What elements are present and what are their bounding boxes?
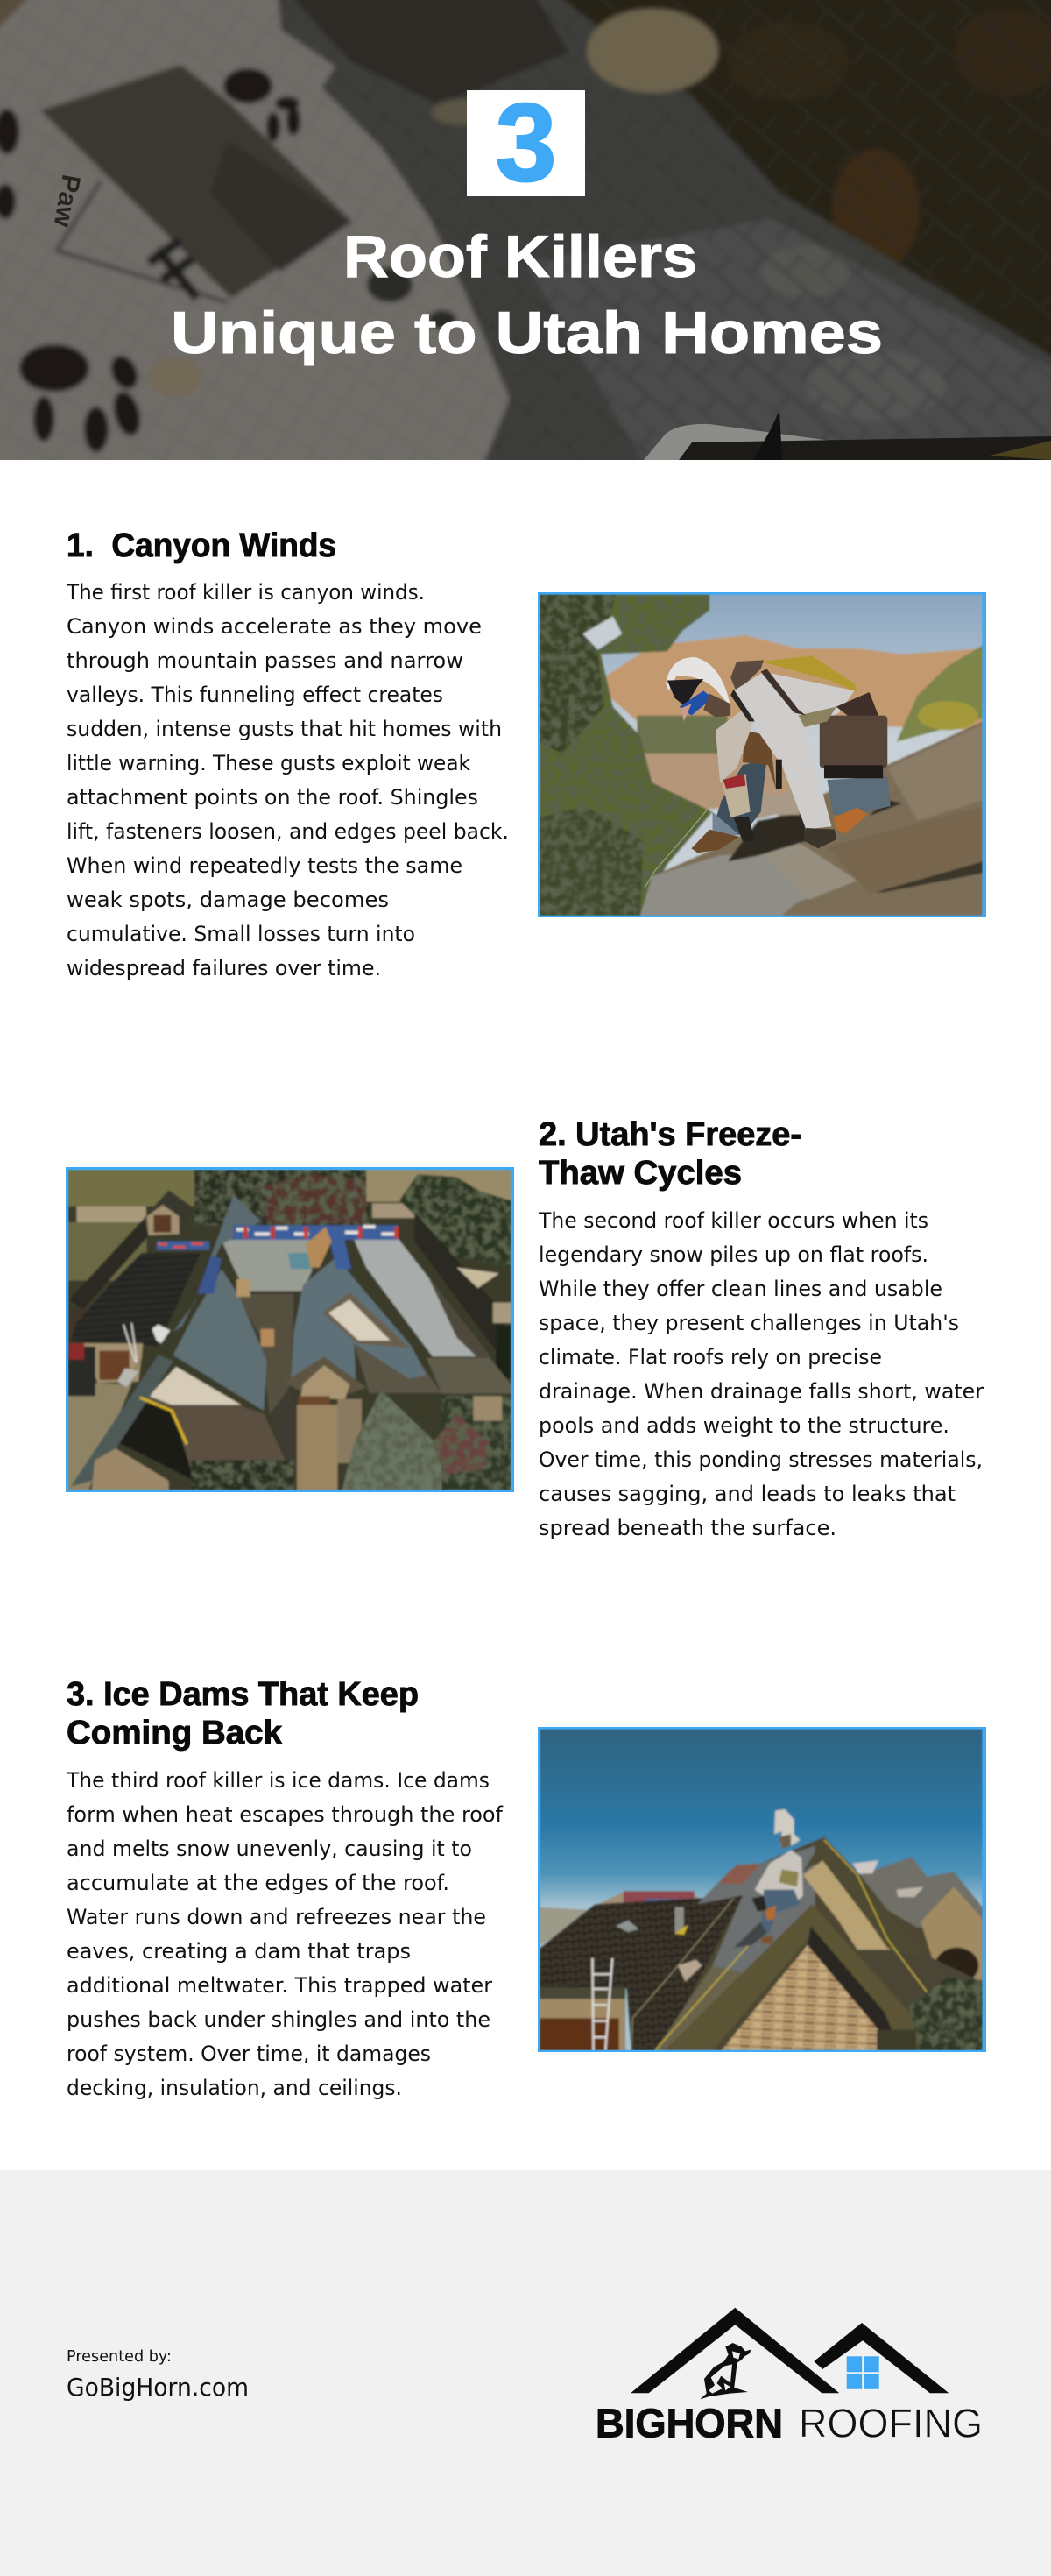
section 1 body text: little warning. These gusts exploit weak	[67, 751, 470, 775]
icon: window	[847, 2356, 879, 2389]
section 3 body text: additional meltwater. This trapped water	[67, 1973, 492, 1998]
header banner with dark roof photo	[0, 0, 1051, 499]
section 1 body text: The first roof killer is canyon winds.	[66, 580, 425, 605]
section 3 body text: decking, insulation, and ceilings.	[67, 2076, 402, 2100]
section 2 heading: Thaw Cycles	[539, 1155, 742, 1192]
section 1 body text: attachment points on the roof. Shingles	[67, 785, 478, 810]
section 2 body text: drainage. When drainage falls short, water	[539, 1379, 984, 1404]
photo 1: roofer kneeling on a slope	[538, 592, 986, 917]
section 2 body text: pools and adds weight to the structure.	[539, 1413, 949, 1438]
section 3 body text	[66, 1768, 504, 2100]
section 3 body text: form when heat escapes through the roof	[67, 1802, 504, 1827]
footer presented-by text: Presented by:	[67, 2347, 172, 2366]
section 2 body text: While they offer clean lines and usable	[539, 1277, 942, 1301]
section 2 body text: Over time, this ponding stresses materials,	[539, 1447, 983, 1472]
footer presented-by text: GoBigHorn.com	[67, 2373, 249, 2402]
section 2 body text: climate. Flat roofs rely on precise	[539, 1345, 882, 1369]
section 3 heading: Coming Back	[67, 1715, 283, 1752]
section 3 heading	[67, 1676, 419, 1752]
section 1 body text: lift, fasteners loosen, and edges peel back.	[67, 819, 509, 844]
section 1 body text: cumulative. Small losses turn into	[67, 922, 415, 946]
footer presented-by text	[67, 2347, 249, 2402]
section 3 body text: and melts snow unevenly, causing it to	[67, 1836, 472, 1861]
wordmark: BIGHORN	[596, 2401, 783, 2446]
section 2 body text: legendary snow piles up on flat roofs.	[539, 1242, 928, 1267]
section 2 heading: 2. Utah's Freeze-	[539, 1116, 801, 1153]
section 1 body text: through mountain passes and narrow	[67, 648, 463, 673]
section 3 body text: accumulate at the edges of the roof.	[67, 1871, 449, 1895]
section 2 body text: spread beneath the surface.	[539, 1516, 836, 1540]
icon: bighorn ram	[700, 2343, 751, 2399]
icon: small roof	[814, 2323, 949, 2393]
title	[171, 223, 883, 366]
section 3 heading: 3. Ice Dams That Keep	[67, 1676, 419, 1713]
title: Roof Killers	[343, 223, 697, 290]
section 3 body text: eaves, creating a dam that traps	[67, 1939, 411, 1964]
section 1 heading: 1. Canyon Winds	[67, 527, 336, 564]
title: Unique to Utah Homes	[171, 300, 883, 366]
section 1 body text: valleys. This funneling effect creates	[67, 683, 443, 707]
section 3 body text: roof system. Over time, it damages	[67, 2042, 431, 2066]
section 3 body text: pushes back under shingles and into the	[67, 2007, 490, 2032]
photo 3: roofers on gable against blue sky	[538, 1727, 986, 2052]
section 2 body text	[538, 1208, 984, 1540]
logo: Bighorn Roofing	[596, 2308, 983, 2446]
number badge	[467, 81, 585, 204]
section 1 body text: widespread failures over time.	[67, 956, 381, 980]
icon: large roof	[631, 2308, 839, 2393]
section 2 body text: space, they present challenges in Utah's	[539, 1311, 959, 1335]
section 1 body text	[66, 580, 509, 980]
solid base behind all roofs so no sky shows through	[683, 1836, 983, 2050]
section 1 body text: Canyon winds accelerate as they move	[67, 614, 482, 639]
section 1 body text: weak spots, damage becomes	[67, 888, 389, 912]
logo: Bighorn Roofing: ROOFING	[799, 2401, 983, 2446]
number badge: 3	[495, 81, 557, 204]
printed word on underlayment: Paw	[48, 173, 86, 230]
section 1 body text: When wind repeatedly tests the same	[67, 853, 462, 878]
footer band	[0, 2170, 1051, 2576]
section 3 body text: The third roof killer is ice dams. Ice dams	[66, 1768, 490, 1793]
section 2 body text: The second roof killer occurs when its	[538, 1208, 928, 1233]
section 1 body text: sudden, intense gusts that hit homes with	[67, 717, 502, 741]
section 2 heading	[539, 1116, 801, 1192]
header foreground gear	[644, 410, 1051, 460]
photo 2: aerial view of house under re-roof	[66, 1167, 514, 1492]
section 3 body text: Water runs down and refreezes near the	[67, 1905, 486, 1929]
roofer figure	[666, 655, 891, 853]
section 2 body text: causes sagging, and leads to leaks that	[539, 1482, 956, 1506]
